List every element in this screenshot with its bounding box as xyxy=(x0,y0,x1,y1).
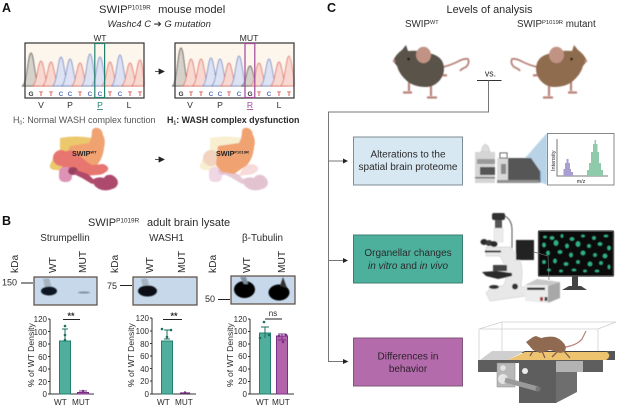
lane labels: kDa xyxy=(208,255,219,273)
chromatogram: WT: T xyxy=(49,91,53,98)
bar chart: beta-Tubulin: 100 xyxy=(234,327,248,336)
chromatogram: WT: T xyxy=(138,91,142,98)
title: P1019R xyxy=(128,4,151,12)
bar chart: Strumpellin: ** xyxy=(67,311,75,321)
chromatogram: WT xyxy=(22,43,144,98)
label WT: WT xyxy=(94,34,106,43)
chromatogram: WT: T xyxy=(108,91,112,98)
chromatogram: WT: C xyxy=(88,91,93,98)
bar chart: WASH1: 40 xyxy=(140,365,150,374)
chromatogram: WT: G xyxy=(28,91,34,98)
bar chart: beta-Tubulin xyxy=(225,309,294,407)
bar chart: beta-Tubulin: 60 xyxy=(238,352,248,361)
chromatogram: mutant: T xyxy=(277,91,281,98)
icon: monitor with cells xyxy=(534,231,614,290)
box: spatial proteome: Alterations to the xyxy=(370,150,446,160)
lane labels xyxy=(10,251,288,273)
WASH complex mutant: P1019R xyxy=(234,150,249,154)
label vs.: vs. xyxy=(485,68,496,78)
label MUT: MUT xyxy=(240,33,259,43)
title: SWIP xyxy=(99,4,128,16)
chromatogram: WT: C xyxy=(59,91,64,98)
hypothesis H0: 0 xyxy=(20,120,22,126)
protein labels: Strumpellin xyxy=(40,233,90,244)
label SWIP WT: SWIP xyxy=(405,19,430,30)
blot: beta-Tubulin xyxy=(231,276,295,304)
amino acids WT xyxy=(38,100,132,110)
bar chart: Strumpellin: MUT xyxy=(72,398,90,407)
box: organellar changes: Organellar changes xyxy=(364,248,452,259)
connector tree xyxy=(328,80,502,364)
panel C: levels of analysis xyxy=(327,1,616,403)
amino acids WT: L xyxy=(127,100,132,110)
box: differences in behavior xyxy=(354,338,462,386)
bar chart: beta-Tubulin: 40 xyxy=(238,365,248,374)
chromatogram: WT: C xyxy=(118,91,123,98)
bar chart: beta-Tubulin: 80 xyxy=(238,340,248,349)
lane labels: MUT xyxy=(78,251,89,273)
lane labels: kDa xyxy=(10,255,21,273)
bar chart: beta-Tubulin: ns xyxy=(269,309,277,318)
bar chart: beta-Tubulin: 0 xyxy=(243,390,248,399)
box: spatial proteome: spatial brain proteome xyxy=(359,162,458,173)
icon: treadmill with mouse xyxy=(478,322,616,403)
chromatogram: mutant: C xyxy=(237,91,242,98)
bar chart: beta-Tubulin: 120 xyxy=(234,315,248,324)
title: Levels of analysis xyxy=(447,4,533,16)
mouse: WT xyxy=(393,45,469,98)
bar chart: Strumpellin: 100 xyxy=(34,328,48,337)
chromatogram: WT: C xyxy=(98,91,103,98)
chromatogram: mutant: T xyxy=(257,91,261,98)
hypothesis H1: H xyxy=(167,115,173,125)
mouse: mutant xyxy=(511,45,587,98)
bar chart: WASH1: 20 xyxy=(140,377,150,386)
label SWIP WT: WT xyxy=(430,20,439,26)
molecular weight markers xyxy=(2,278,230,304)
WASH complex WT: WT xyxy=(90,150,97,154)
box: differences in behavior: behavior xyxy=(389,364,428,375)
chart: mass spectrum: m/z xyxy=(577,179,586,185)
icon: microscope xyxy=(480,213,534,301)
lane labels: MUT xyxy=(277,251,288,273)
hypothesis H0: H xyxy=(13,115,20,125)
molecular weight markers: 75 xyxy=(107,281,117,291)
box: organellar changes: in vitro and in vivo xyxy=(368,261,448,272)
chromatogram: mutant: T xyxy=(199,91,203,98)
bar chart: WASH1: 120 xyxy=(136,314,150,323)
title: adult brain lysate xyxy=(147,217,230,229)
amino acids WT: P xyxy=(97,100,103,110)
chromatogram: mutant xyxy=(172,43,294,98)
chart: mass spectrum: Intensity xyxy=(551,150,557,171)
bar chart: Strumpellin: 120 xyxy=(34,315,48,324)
bar chart: Strumpellin: % of WT Density xyxy=(26,322,36,387)
bar chart: beta-Tubulin: % of WT Density xyxy=(225,322,235,387)
title: P1019R xyxy=(116,218,140,224)
bar chart: WASH1: ** xyxy=(170,311,178,321)
arrow: WT to mutant chromatogram xyxy=(155,69,164,74)
subtitle: Washc4 C ➔ G mutation xyxy=(108,19,211,30)
title: SWIP xyxy=(88,217,116,229)
amino acids mutant: R xyxy=(247,100,253,110)
icon: mass spectrometer xyxy=(475,133,547,185)
bar chart: Strumpellin: 0 xyxy=(43,390,48,399)
WASH complex mutant: SWIP xyxy=(216,149,234,158)
chromatogram: WT: T xyxy=(39,91,43,98)
bar chart: Strumpellin xyxy=(26,311,94,407)
bar chart: beta-Tubulin: WT xyxy=(256,398,269,407)
hypothesis H0: : Normal WASH complex function xyxy=(22,115,156,125)
protein labels: β-Tubulin xyxy=(242,233,283,244)
chromatogram: mutant: T xyxy=(189,91,193,98)
WASH complex WT: SWIP xyxy=(72,149,90,158)
bar chart: beta-Tubulin: 20 xyxy=(238,377,248,386)
panel letter B: B xyxy=(2,214,11,228)
bar chart: Strumpellin: WT xyxy=(54,398,67,407)
panel B: brain lysate xyxy=(2,214,295,407)
blot: Strumpellin xyxy=(34,277,97,305)
bar chart: WASH1: MUT xyxy=(175,398,193,407)
bar chart: WASH1: 60 xyxy=(140,352,150,361)
lane labels: kDa xyxy=(110,255,121,273)
lane labels: WT xyxy=(242,257,253,273)
chromatogram: mutant: C xyxy=(267,91,272,98)
chromatogram: mutant: T xyxy=(287,91,291,98)
chromatogram: WT: T xyxy=(128,91,132,98)
bar chart: Strumpellin: 80 xyxy=(38,340,48,349)
bar chart: WASH1: 0 xyxy=(145,390,150,399)
amino acids mutant: P xyxy=(217,100,223,110)
molecular weight markers: 150 xyxy=(2,278,17,288)
lane labels: MUT xyxy=(177,251,188,273)
panel A: mouse model xyxy=(2,1,299,190)
chromatogram: WT: T xyxy=(78,91,82,98)
hypothesis H1: 1 xyxy=(173,120,176,126)
label SWIP mutant: P1019R xyxy=(542,20,563,26)
bar chart: WASH1 xyxy=(126,311,196,407)
label SWIP mutant: SWIP xyxy=(517,19,542,30)
bar chart: WASH1: 80 xyxy=(140,340,150,349)
bar chart: WASH1: WT xyxy=(157,398,170,407)
WASH complex mutant xyxy=(200,128,268,190)
molecular weight markers: 50 xyxy=(205,294,215,304)
WASH complex WT xyxy=(50,128,118,190)
amino acids mutant xyxy=(187,100,282,110)
chromatogram: mutant: C xyxy=(218,91,223,98)
title: mouse model xyxy=(155,4,225,16)
amino acids mutant: L xyxy=(277,100,282,110)
chromatogram: WT: C xyxy=(68,91,73,98)
box: spatial proteome xyxy=(354,137,462,185)
protein labels xyxy=(40,233,283,244)
hypothesis H1: : WASH complex dysfunction xyxy=(176,115,299,125)
chromatogram: mutant: G xyxy=(247,91,253,98)
chromatogram: mutant: C xyxy=(209,91,214,98)
arrow: WT to mutant complex xyxy=(155,157,164,162)
protein labels: WASH1 xyxy=(149,233,184,244)
box: differences in behavior: Differences in xyxy=(378,352,438,362)
bar chart: beta-Tubulin: MUT xyxy=(272,398,290,407)
blot: WASH1 xyxy=(133,277,197,305)
amino acids WT: V xyxy=(38,100,44,110)
bar chart: Strumpellin: 60 xyxy=(38,353,48,362)
chromatogram: mutant: T xyxy=(227,91,231,98)
bar chart: Strumpellin: 20 xyxy=(38,378,48,387)
amino acids WT: P xyxy=(67,100,73,110)
label SWIP mutant: mutant xyxy=(563,19,596,30)
lane labels: WT xyxy=(145,257,156,273)
bar chart: WASH1: % of WT Density xyxy=(126,322,136,387)
icon: controller box xyxy=(525,279,560,303)
panel letter A: A xyxy=(2,1,11,15)
amino acids mutant: V xyxy=(187,100,193,110)
chart: mass spectrum xyxy=(548,134,614,185)
box: organellar changes xyxy=(354,235,462,283)
bar chart: Strumpellin: 40 xyxy=(38,365,48,374)
panel letter C: C xyxy=(327,1,336,15)
bar chart: WASH1: 100 xyxy=(136,327,150,336)
chromatogram: mutant: G xyxy=(178,91,184,98)
lane labels: WT xyxy=(48,257,59,273)
